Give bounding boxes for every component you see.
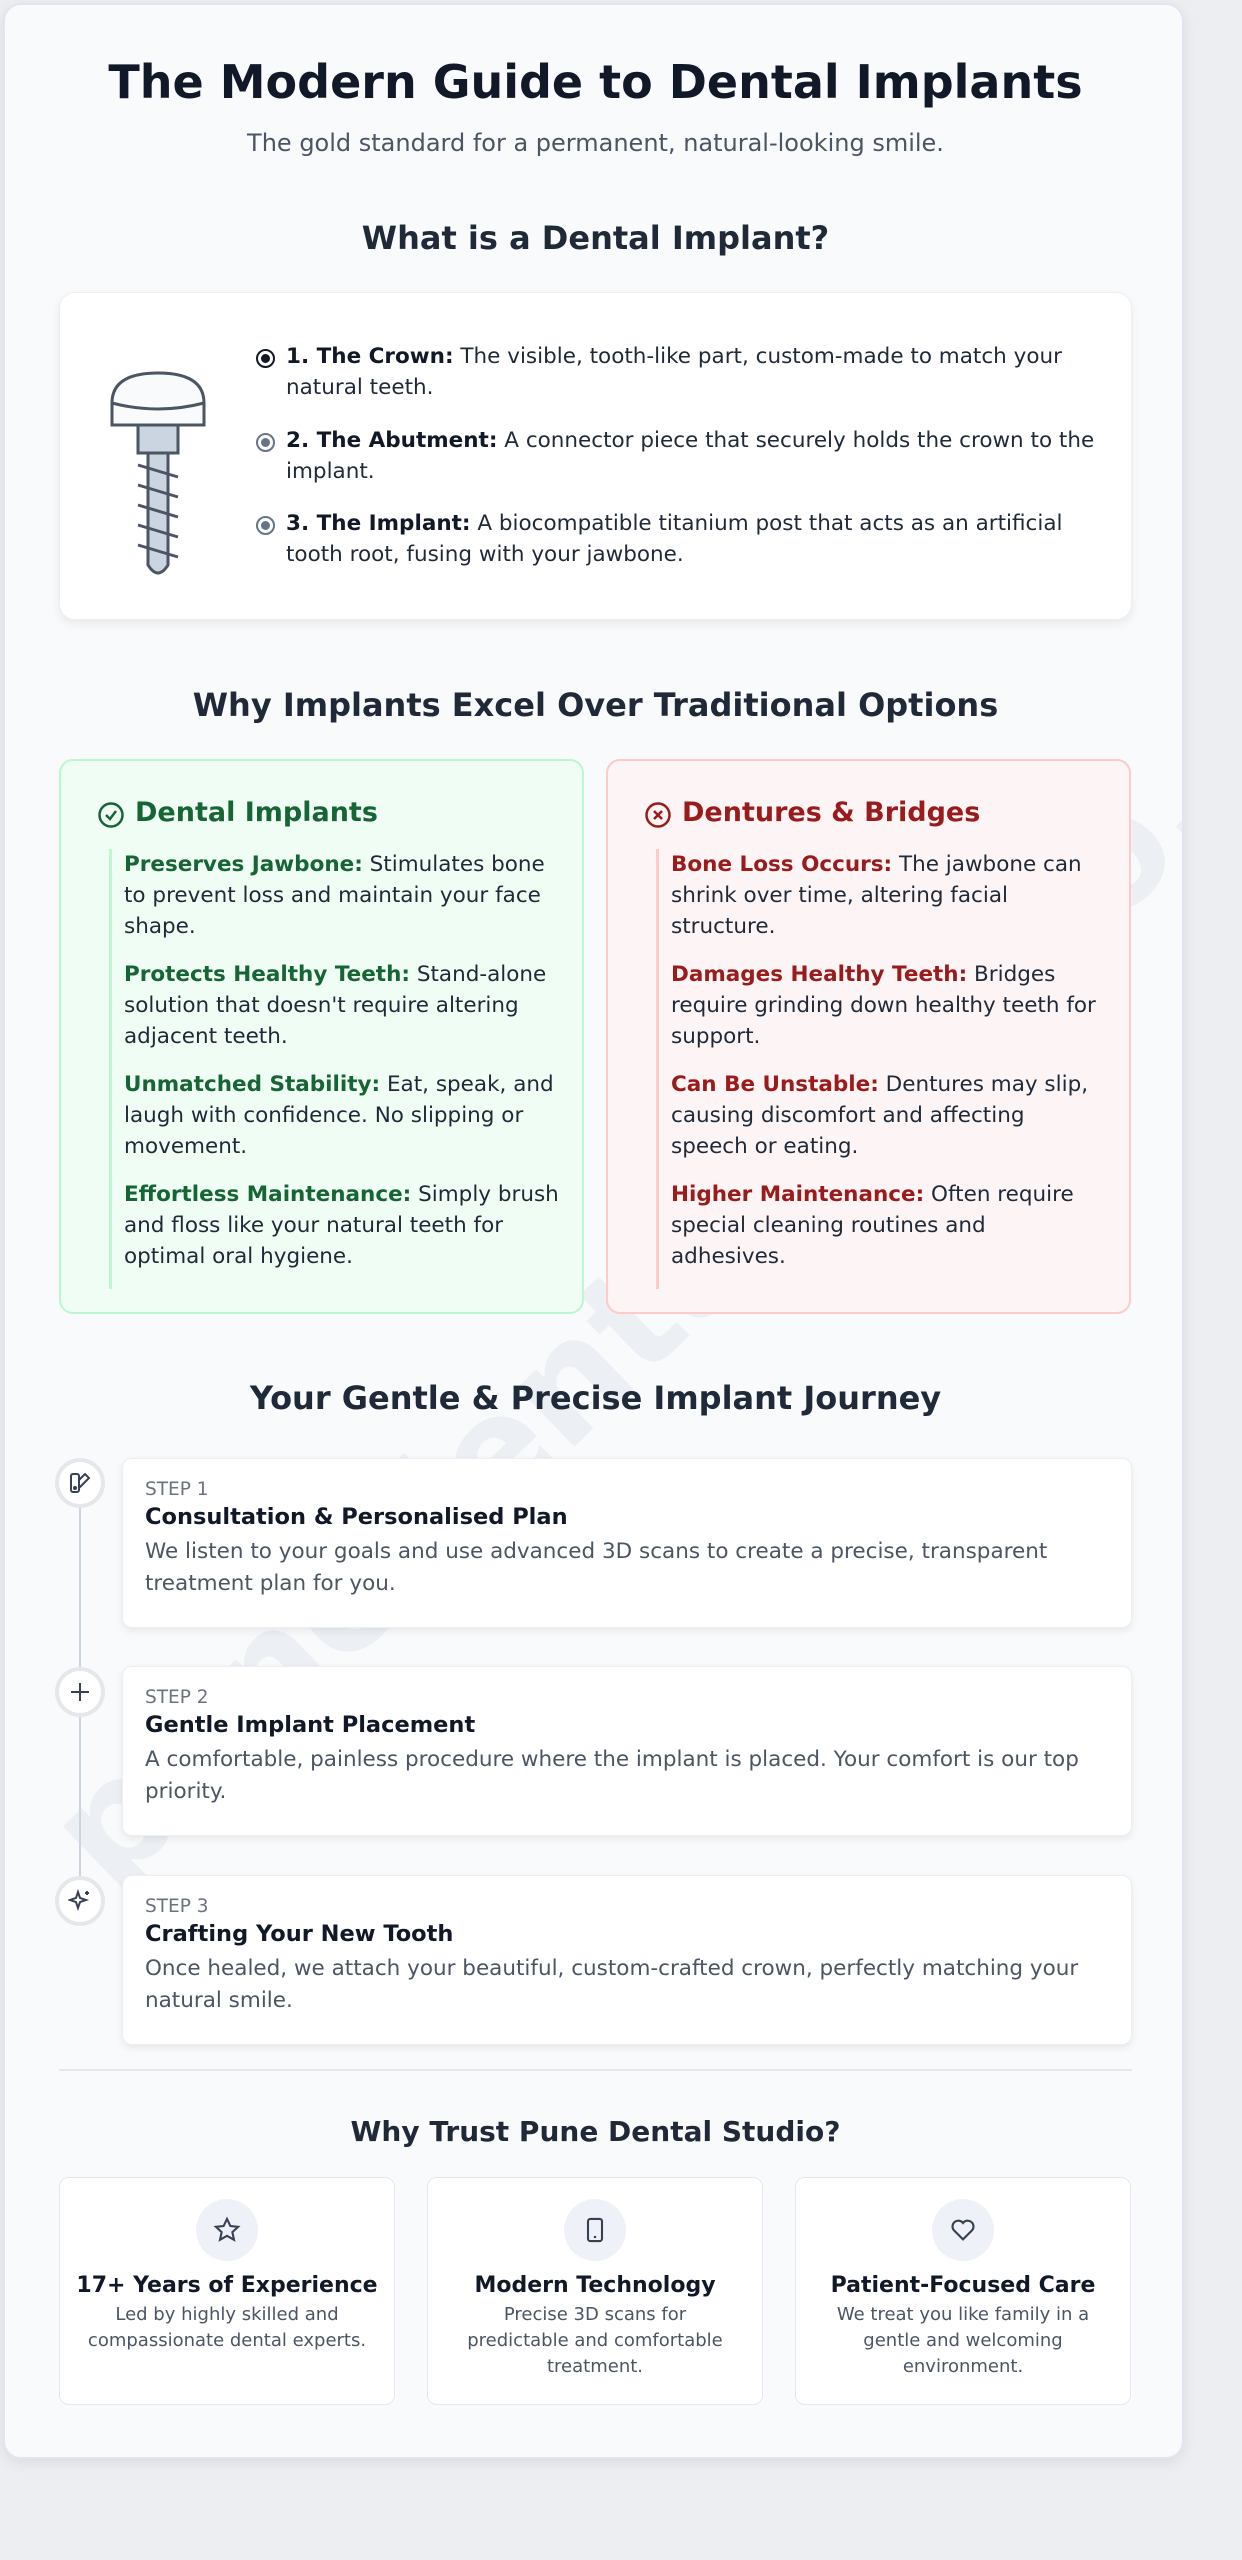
timeline line xyxy=(79,1485,81,1905)
step 3 card xyxy=(122,1875,1132,2045)
list: drawbacks: Damages Healthy Teeth: Bridges require grinding down healthy teeth for support. xyxy=(671,962,1096,1049)
list: implant benefits: Effortless Maintenance: Simply brush and floss like your natural teeth for optimal oral hygiene. xyxy=(124,1182,559,1269)
panel: dentures & bridges: Dentures & Bridges xyxy=(682,797,980,828)
trust card: experience: 17+ Years of Experience xyxy=(76,2273,378,2298)
panel: dental implants xyxy=(59,759,584,1314)
step 1 card: We listen to your goals and use advanced 3D scans to create a precise, transparent treatment plan for you. xyxy=(145,1539,1047,1596)
item: abutment: 2. The Abutment: A connector piece that securely holds the crown to the implant. xyxy=(286,428,1094,484)
panel: dental implants: Dental Implants xyxy=(135,797,378,828)
list: implant benefits: Protects Healthy Teeth: Stand-alone solution that doesn't require altering adjacent teeth. xyxy=(124,962,546,1049)
step 2 card: STEP 2 xyxy=(145,1687,209,1708)
subtitle: The gold standard for a permanent, natural-looking smile. xyxy=(247,129,944,157)
trust card: care: We treat you like family in a gentle and welcoming environment. xyxy=(837,2304,1089,2377)
trust card: technology: Precise 3D scans for predictable and comfortable treatment. xyxy=(467,2304,723,2377)
item: implant: 3. The Implant: A biocompatible titanium post that acts as an artificial tooth root, fusing with your jawbone. xyxy=(286,511,1062,567)
icon: check circle xyxy=(98,802,124,828)
step 3 card: STEP 3 xyxy=(145,1896,209,1917)
list: drawbacks: Can Be Unstable: Dentures may slip, causing discomfort and affecting speech or eating. xyxy=(671,1072,1088,1159)
step 2 card xyxy=(122,1666,1132,1836)
list: drawbacks: Higher Maintenance: Often require special cleaning routines and adhesives. xyxy=(671,1182,1074,1269)
trust card: technology xyxy=(427,2177,763,2405)
heading: what is: What is a Dental Implant? xyxy=(362,219,829,257)
icon: step 3 xyxy=(55,1876,105,1926)
step 1 card xyxy=(122,1458,1132,1628)
step 2 card: Gentle Implant Placement xyxy=(145,1712,475,1738)
heading: why implants: Why Implants Excel Over Traditional Options xyxy=(193,686,998,724)
trust card: experience: Led by highly skilled and compassionate dental experts. xyxy=(88,2304,366,2351)
step 3 card: Once healed, we attach your beautiful, custom-crafted crown, perfectly matching your natural smile. xyxy=(145,1956,1078,2013)
list: drawbacks xyxy=(656,849,1096,1289)
trust card: experience xyxy=(59,2177,395,2405)
icon: step 2 xyxy=(55,1667,105,1717)
title: The Modern Guide to Dental Implants xyxy=(108,55,1083,109)
step 3 card: Crafting Your New Tooth xyxy=(145,1921,453,1947)
icon: step 1 xyxy=(55,1458,105,1508)
trust card: technology: Modern Technology xyxy=(474,2273,716,2298)
panel: dentures & bridges xyxy=(606,759,1131,1314)
list: implant benefits: Preserves Jawbone: Stimulates bone to prevent loss and maintain your face shape. xyxy=(124,852,545,939)
list: implant benefits: Unmatched Stability: Eat, speak, and laugh with confidence. No slipping or movement. xyxy=(124,1072,554,1159)
panel: implant anatomy xyxy=(59,292,1132,620)
step 1 card: Consultation & Personalised Plan xyxy=(145,1504,568,1530)
icon: implant diagram xyxy=(110,372,206,574)
heading: why trust: Why Trust Pune Dental Studio? xyxy=(351,2115,840,2148)
list: drawbacks: Bone Loss Occurs: The jawbone can shrink over time, altering facial structure. xyxy=(671,852,1082,939)
trust card: care xyxy=(795,2177,1131,2405)
trust card: care: Patient-Focused Care xyxy=(831,2273,1095,2298)
icon: x circle xyxy=(645,802,671,828)
heading: journey: Your Gentle & Precise Implant Journey xyxy=(250,1379,941,1417)
list: implant benefits xyxy=(109,849,564,1289)
step 2 card: A comfortable, painless procedure where the implant is placed. Your comfort is our top priority. xyxy=(145,1747,1079,1804)
item: crown: 1. The Crown: The visible, tooth-like part, custom-made to match your natural teeth. xyxy=(286,344,1062,400)
step 1 card: STEP 1 xyxy=(145,1479,209,1500)
